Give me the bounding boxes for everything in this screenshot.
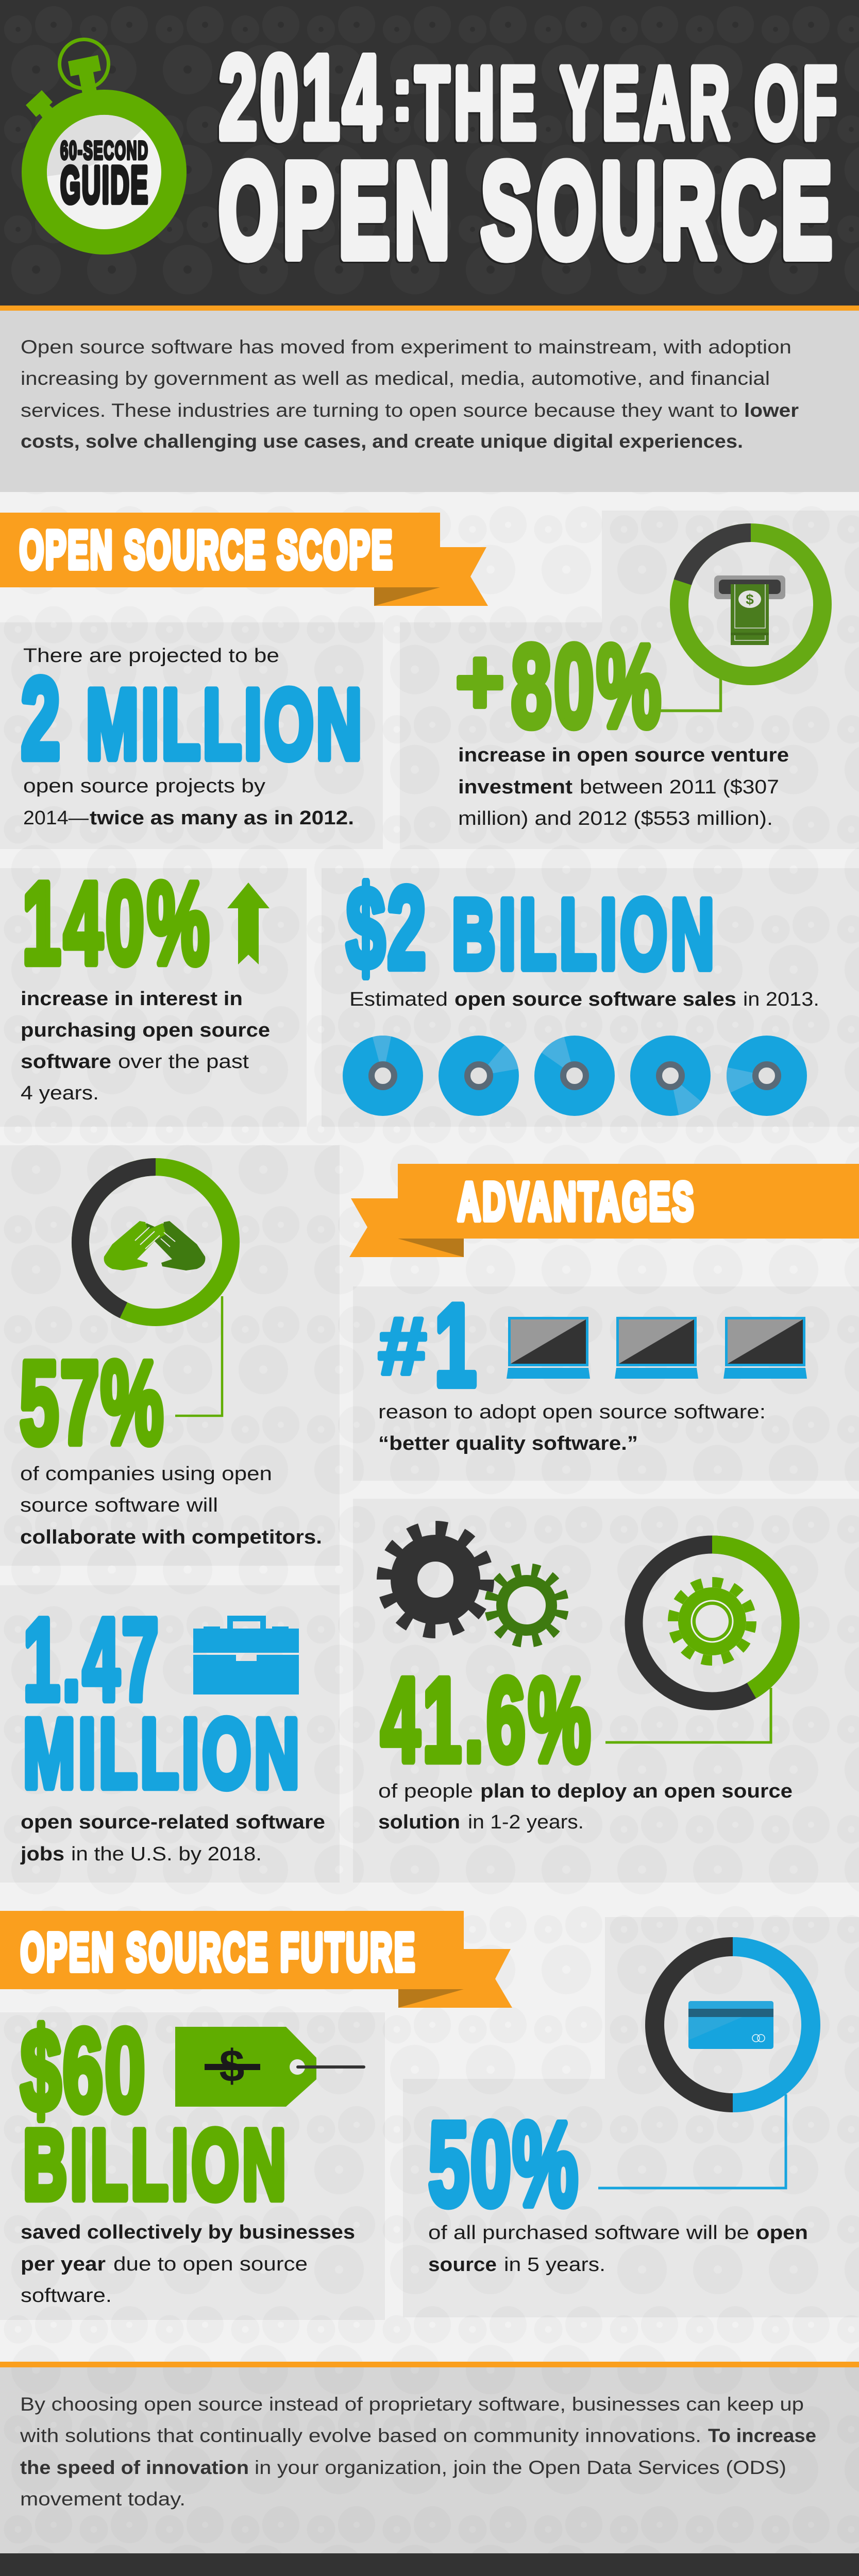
panel: #1 reason: “better quality software.”	[378, 1433, 638, 1454]
panel: 2 million projects	[0, 622, 383, 849]
title: :	[392, 53, 413, 136]
icon: briefcase	[193, 1616, 299, 1694]
panel: 41.6% deploy: of people	[378, 1781, 473, 1802]
title	[219, 31, 837, 284]
stat: #1: #	[378, 1300, 427, 1392]
icon: cash machine: $	[746, 591, 754, 607]
panel: 41.6% deploy: solution	[378, 1811, 460, 1833]
stat: +80%: 80%	[511, 621, 661, 752]
intro text	[21, 336, 799, 452]
panel: 50% purchased software: source	[428, 2254, 497, 2276]
stat: 1.47 million: 1.47	[23, 1594, 159, 1724]
stat: $60 billion: BILLION	[23, 2109, 286, 2219]
stat: #1: 1	[434, 1280, 477, 1411]
stat: $60 billion	[21, 2005, 286, 2219]
panel: #1 reason	[353, 1280, 859, 1481]
panel: closing statement	[0, 2362, 859, 2553]
title: OPEN SOURCE	[219, 137, 832, 284]
panel: 1.47 million jobs: open source-related software	[21, 1811, 325, 1833]
panel: $2 billion sales: Estimated	[349, 989, 448, 1010]
stat: 2 million	[21, 655, 362, 783]
closing text: By choosing open source instead of proprietary software, businesses can keep up	[20, 2394, 804, 2415]
icon: five discs	[343, 1036, 807, 1116]
panel: open source scope heading: OPEN SOURCE SCOPE	[20, 520, 392, 579]
panel: 140% interest	[0, 858, 307, 1127]
panel: 57% collaborate: collaborate with competitors.	[20, 1527, 322, 1548]
panel: open source future heading: OPEN SOURCE FUTURE	[21, 1922, 415, 1982]
stat: $60 billion: $60	[21, 2005, 145, 2136]
connector line	[661, 679, 720, 711]
stat: 2 million: 2	[21, 655, 60, 783]
badge label: 60-SECOND	[60, 135, 148, 165]
panel: 57% collaborate: of companies using open	[20, 1463, 272, 1485]
stat: 2 million: MILLION	[86, 669, 362, 779]
stat: #1	[378, 1280, 477, 1411]
panel: 50% purchased software: of all purchased software will be	[428, 2222, 749, 2244]
closing text: with solutions that continually evolve based on community innovations.	[20, 2425, 701, 2446]
panel: 2 million projects: open source projects by	[23, 775, 265, 797]
panel: open source future heading	[0, 1911, 512, 2008]
icon: price tag	[175, 2027, 365, 2107]
stat: 57%: 57%	[20, 1337, 163, 1468]
panel: +80% venture investment: increase in open source venture	[458, 744, 789, 766]
icon: green gear	[486, 1565, 567, 1646]
closing text	[20, 2394, 816, 2510]
donut chart: 80%	[679, 533, 822, 676]
panel: $2 billion sales: open source software sales	[454, 989, 736, 1010]
stat: 41.6%: 41.6%	[381, 1654, 591, 1787]
closing text: movement today.	[20, 2488, 186, 2510]
panel: 140% interest: purchasing open source	[21, 1020, 270, 1041]
stat: $2 billion: BILLION	[452, 879, 714, 989]
connector line	[605, 1688, 771, 1742]
icon: stopwatch badge	[22, 39, 187, 255]
panel: 2 million projects: 2014—	[23, 807, 89, 829]
icon: cash machine	[714, 575, 785, 645]
panel: 1.47 million jobs: in the U.S. by 2018.	[71, 1843, 262, 1865]
panel: 1.47 million jobs: jobs	[20, 1843, 64, 1865]
panel: $60 billion saved: saved collectively by businesses	[21, 2222, 355, 2243]
panel: 41.6% deploy	[353, 1499, 859, 1883]
panel: advantages heading	[349, 1164, 859, 1257]
panel: $60 billion saved: due to open source	[113, 2253, 308, 2275]
panel: 140% interest: software	[21, 1051, 111, 1073]
panel: 57% collaborate: source software will	[20, 1495, 218, 1516]
connector line	[598, 2094, 786, 2188]
panel: 50% purchased software: open	[756, 2222, 808, 2244]
panel: +80% venture investment: investment	[458, 776, 572, 798]
panel: intro	[0, 311, 859, 492]
stat: 50%: 50%	[428, 2097, 578, 2230]
panel: 50% purchased software	[403, 1917, 859, 2317]
intro text: services. These industries are turning to open source because they want to	[21, 400, 738, 421]
panel: +80% venture investment	[400, 511, 859, 849]
panel: $60 billion saved	[0, 2005, 385, 2320]
panel: 1.47 million jobs	[0, 1585, 340, 1883]
panel: 50% purchased software: in 5 years.	[504, 2254, 605, 2276]
icon: dark gear	[384, 1528, 487, 1631]
icon: credit card	[688, 2001, 773, 2049]
donut chart: 41.6%	[634, 1545, 790, 1701]
footer	[0, 2553, 859, 2576]
stat: 1.47 million: MILLION	[23, 1699, 299, 1808]
panel: 41.6% deploy: plan to deploy an open source	[480, 1781, 793, 1802]
icon: laptops	[507, 1318, 807, 1379]
icon: gear in donut	[673, 1582, 751, 1660]
panel: advantages heading: ADVANTAGES	[458, 1172, 694, 1231]
panel: #1 reason: reason to adopt open source software:	[378, 1401, 766, 1423]
panel: 140% interest: increase in interest in	[21, 988, 243, 1010]
panel: 140% interest: 140%	[22, 858, 209, 989]
intro text: increasing by government as well as medical, media, automotive, and financial	[21, 368, 770, 389]
intro text: costs, solve challenging use cases, and create unique digital experiences.	[21, 431, 743, 452]
stat: 1.47 million	[23, 1594, 299, 1808]
panel: 2 million projects: There are projected to be	[23, 645, 279, 667]
icon: price tag: $	[220, 2040, 244, 2091]
closing text: the speed of innovation	[20, 2457, 249, 2478]
donut chart: 57%	[80, 1167, 231, 1317]
panel: $60 billion saved: per year	[21, 2253, 106, 2275]
panel: 140% interest: 4 years.	[21, 1082, 99, 1104]
panel: 2 million projects: twice as many as in 2012.	[90, 807, 354, 829]
panel: $60 billion saved: software.	[21, 2285, 112, 2307]
header band	[0, 0, 859, 311]
title: THE YEAR OF	[415, 46, 837, 160]
intro text: Open source software has moved from experiment to mainstream, with adoption	[21, 336, 791, 358]
panel: 140% interest: over the past	[118, 1051, 249, 1073]
closing text: To increase	[708, 2425, 816, 2446]
panel: +80% venture investment: million) and 2012 ($553 million).	[458, 808, 773, 829]
panel: +80% venture investment: between 2011 ($307	[580, 776, 779, 798]
stat: $2 billion: $2	[346, 863, 426, 993]
panel: open source scope heading	[0, 513, 488, 606]
closing text: in your organization, join the Open Data Services (ODS)	[255, 2457, 786, 2478]
stat: +80%: +	[456, 630, 504, 734]
title: 2014	[219, 31, 381, 163]
panel: $2 billion sales	[322, 863, 859, 1127]
panel: 57% collaborate	[0, 1145, 340, 1566]
connector line	[175, 1296, 222, 1416]
donut chart: 50%	[654, 1946, 811, 2103]
icon: up arrow	[227, 883, 270, 964]
icon: hands	[104, 1221, 205, 1270]
intro text: lower	[744, 400, 799, 421]
badge label: GUIDE	[60, 156, 148, 214]
stat: $2 billion	[346, 863, 714, 993]
panel: 41.6% deploy: in 1-2 years.	[468, 1811, 584, 1833]
panel: $2 billion sales: in 2013.	[743, 989, 819, 1010]
